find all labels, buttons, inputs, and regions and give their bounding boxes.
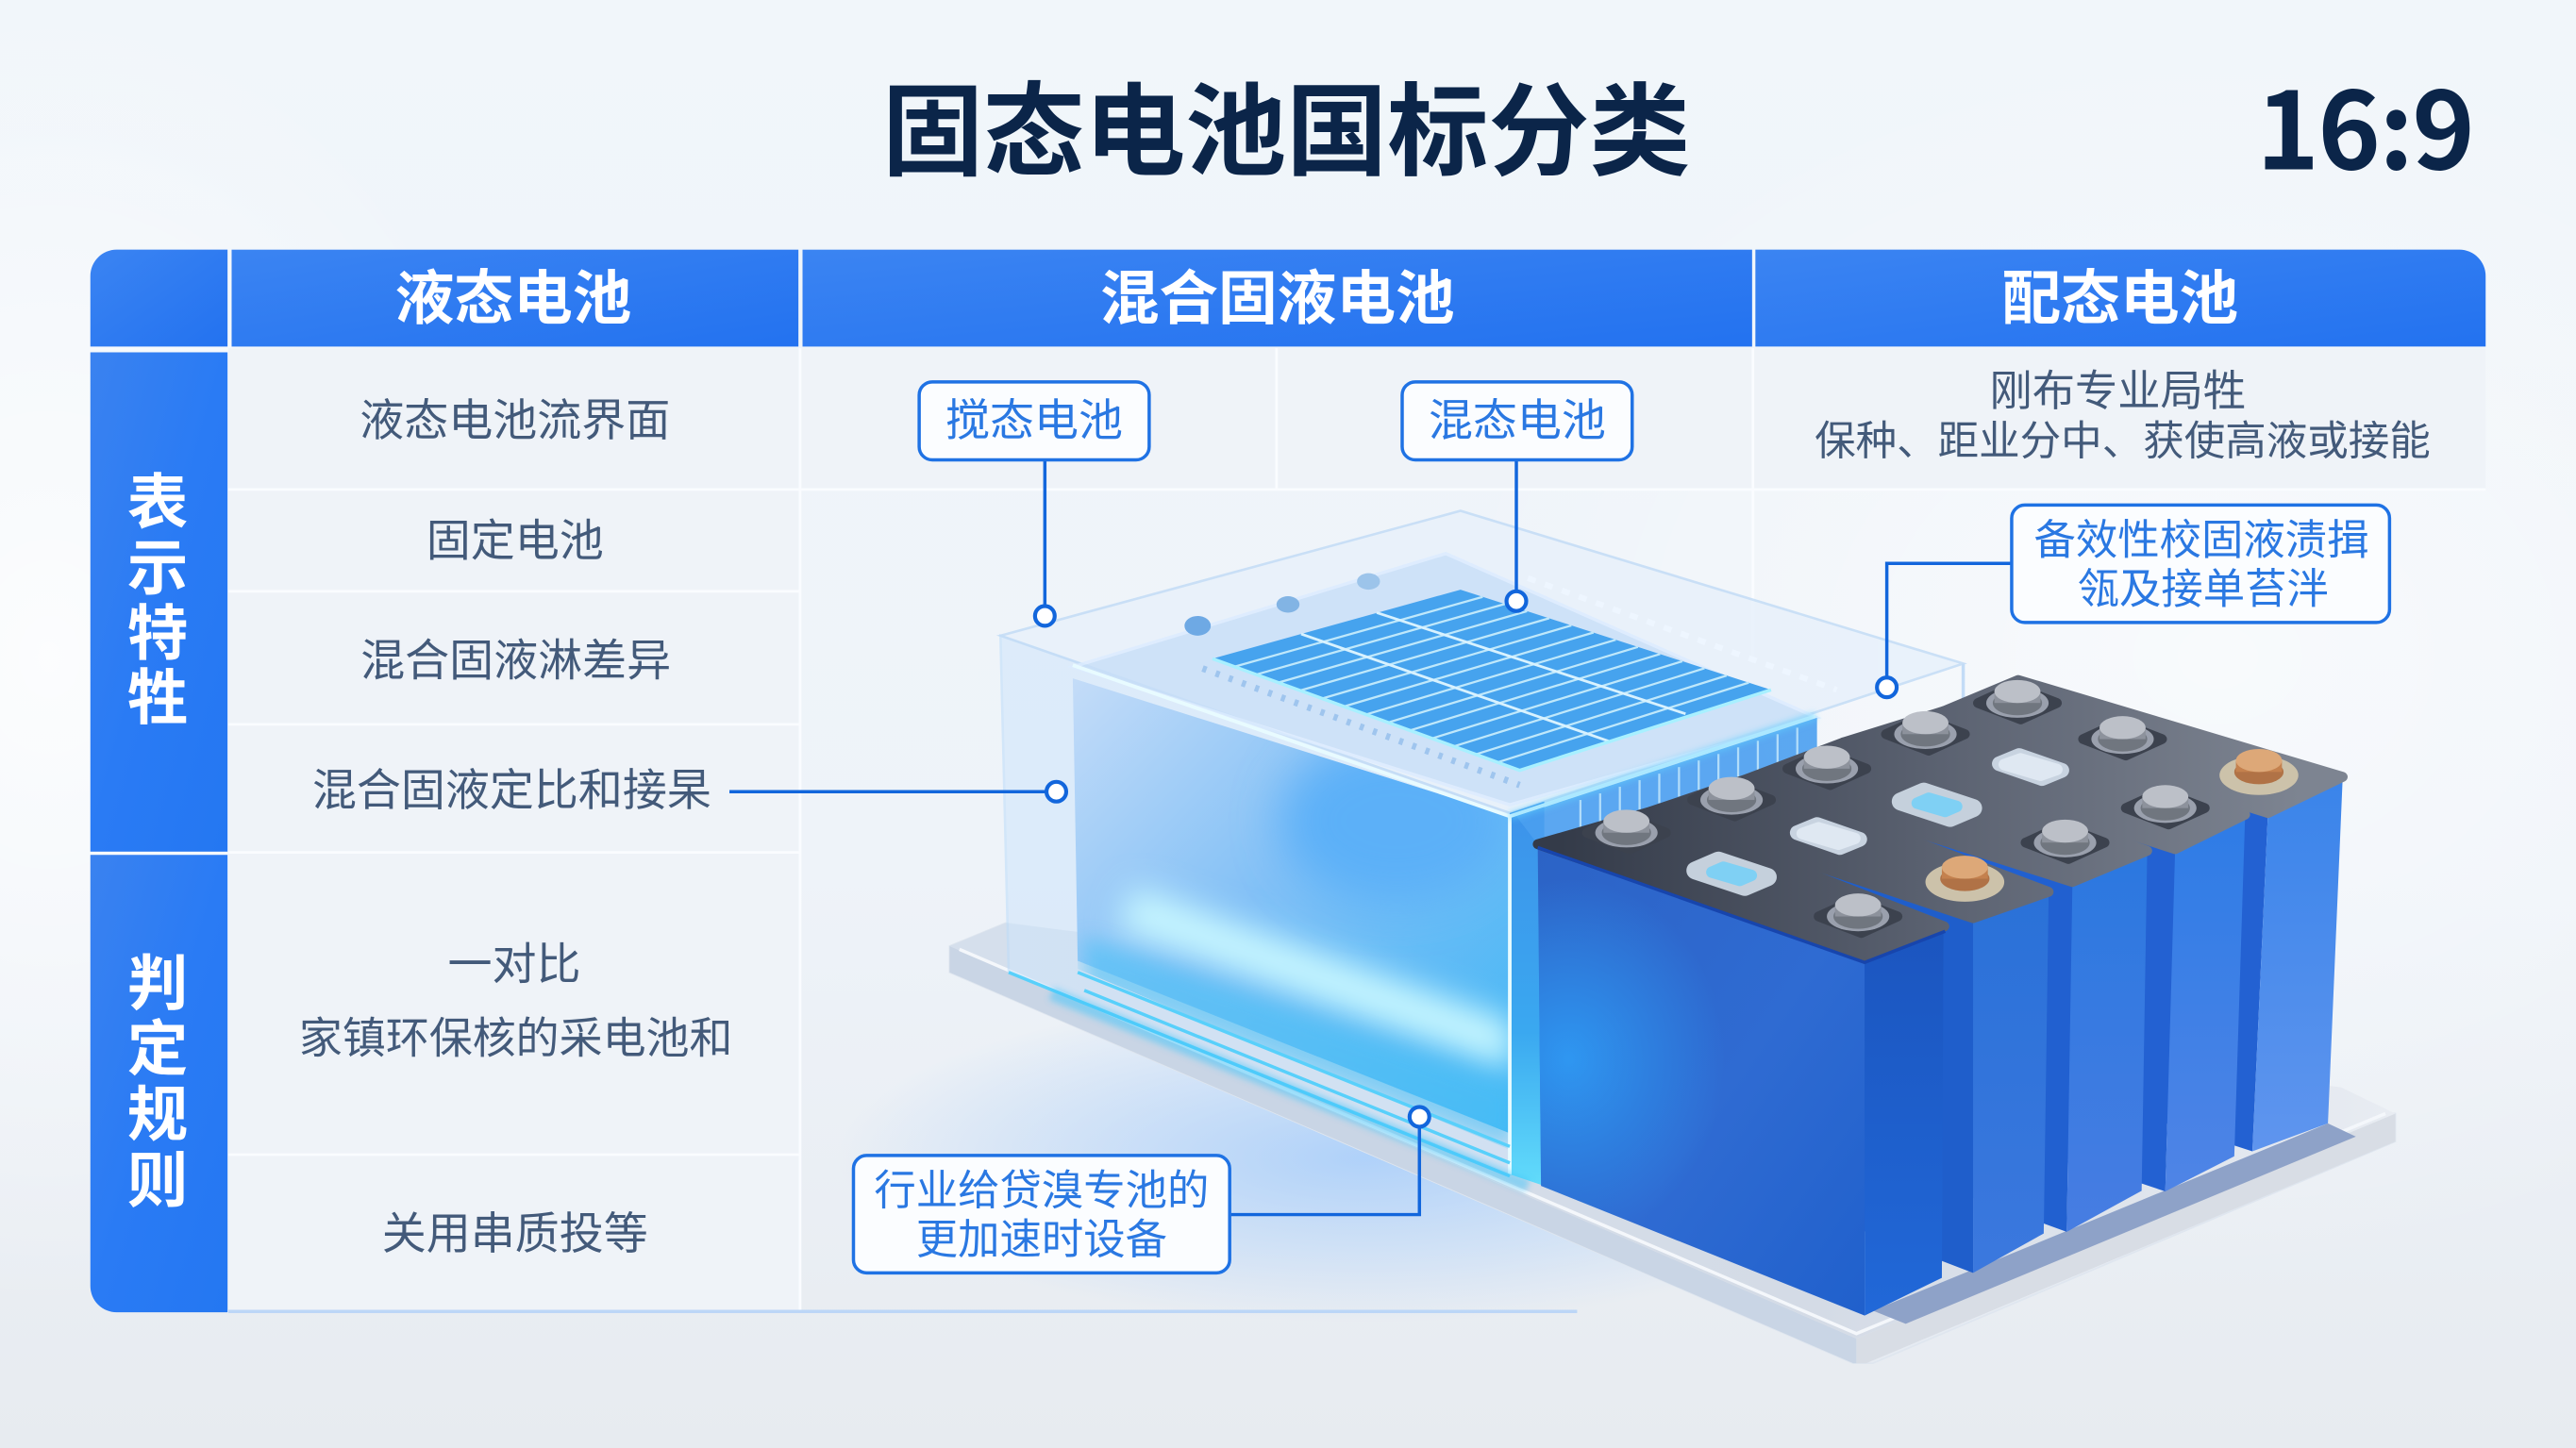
cooling panel grid bbox=[1213, 590, 1771, 771]
battery cell 5 bbox=[1944, 680, 2343, 1152]
cell text: liquid column: 液态电池流界面 bbox=[360, 395, 670, 445]
glass left face bbox=[1000, 636, 1510, 1174]
illustration: tray plate bbox=[949, 924, 2395, 1363]
callout: table row leader bbox=[729, 782, 1066, 802]
row heading: rules: 规 bbox=[127, 1081, 188, 1149]
terminal bumps and perforations bbox=[1184, 574, 1837, 785]
comb strip under top bbox=[1516, 718, 1817, 844]
callout: lower left: 更加速时设备 bbox=[916, 1217, 1167, 1263]
soft blue glow on floor bbox=[838, 993, 1889, 1323]
callout: left pill with leader bbox=[919, 382, 1149, 625]
callout: centre pill with leader: 混态电池 bbox=[1429, 395, 1606, 445]
panel: classification table bbox=[91, 250, 2485, 1312]
liquid glow band bbox=[1084, 740, 1514, 1150]
illustration: prismatic battery pack bbox=[1532, 675, 2348, 1316]
row heading: rules bbox=[91, 855, 227, 1312]
cell text: liquid column: 家镇环保核的采电池和 bbox=[299, 1013, 732, 1062]
cell text: third column: 刚布专业局牲 bbox=[1989, 367, 2246, 415]
glowing edges bbox=[1073, 665, 1815, 1174]
glass top bbox=[1000, 511, 1964, 813]
row heading: rules: 判 bbox=[127, 950, 188, 1018]
header: liquid: 液态电池 bbox=[395, 266, 631, 332]
cell text: liquid column: 混合固液定比和接杲 bbox=[312, 765, 711, 815]
illustration: transparent electrolyte cell bbox=[1000, 511, 1964, 1186]
row heading: characteristics: 特 bbox=[127, 600, 188, 668]
battery cell 4 bbox=[1843, 711, 2245, 1191]
callout: upper right bbox=[1877, 505, 2389, 697]
callout: centre pill with leader bbox=[1402, 382, 1632, 611]
battery cell 3 bbox=[1748, 742, 2148, 1232]
callout: left pill with leader: 搅态电池 bbox=[945, 395, 1123, 445]
battery cell 1 bbox=[1532, 807, 1949, 1316]
header: third column: 配态电池 bbox=[2002, 266, 2238, 332]
row heading: characteristics bbox=[91, 352, 227, 852]
callout: lower left: 行业给贷溴专池的 bbox=[874, 1168, 1209, 1214]
cell text: liquid column: 固定电池 bbox=[427, 515, 604, 565]
callout: upper right: 备效性校固液渍揖 bbox=[2034, 517, 2369, 563]
cell text: third column: 保种、距业分中、获使高液或接能 bbox=[1815, 419, 2431, 464]
cell text: liquid column: 混合固液淋差异 bbox=[360, 635, 671, 685]
row heading: rules: 定 bbox=[127, 1016, 188, 1084]
inner top plane bbox=[1073, 554, 1817, 805]
right side strip bbox=[1510, 802, 1545, 1186]
table header row bbox=[91, 250, 2485, 346]
comb ticks bbox=[1581, 727, 1798, 829]
liquid block bbox=[1073, 678, 1510, 1133]
row heading: characteristics: 示 bbox=[127, 534, 188, 602]
cell text: liquid column: 关用串质投等 bbox=[382, 1208, 648, 1258]
title: 固态电池国标分类 bbox=[882, 50, 1691, 196]
glass back right edge bbox=[1963, 663, 1965, 709]
header: hybrid: 混合固液电池 bbox=[1100, 266, 1455, 332]
table grid lines bbox=[228, 348, 2485, 1312]
callout: lower left bbox=[853, 1107, 1430, 1273]
cell text: liquid column bbox=[299, 395, 732, 1258]
callout: upper right: 瓴及接单苔泮 bbox=[2078, 567, 2329, 613]
cell text: liquid column: 一对比 bbox=[447, 940, 580, 990]
battery cell 2 bbox=[1651, 778, 2049, 1273]
cell terminals and vents bbox=[1587, 680, 2299, 933]
row heading: characteristics: 牲 bbox=[127, 664, 188, 732]
aspect ratio label: 16:9 bbox=[2256, 46, 2473, 201]
cell text: third column bbox=[1815, 367, 2431, 464]
row heading: rules: 则 bbox=[127, 1147, 188, 1215]
table body background bbox=[228, 348, 2485, 1312]
row heading: characteristics: 表 bbox=[127, 469, 188, 537]
